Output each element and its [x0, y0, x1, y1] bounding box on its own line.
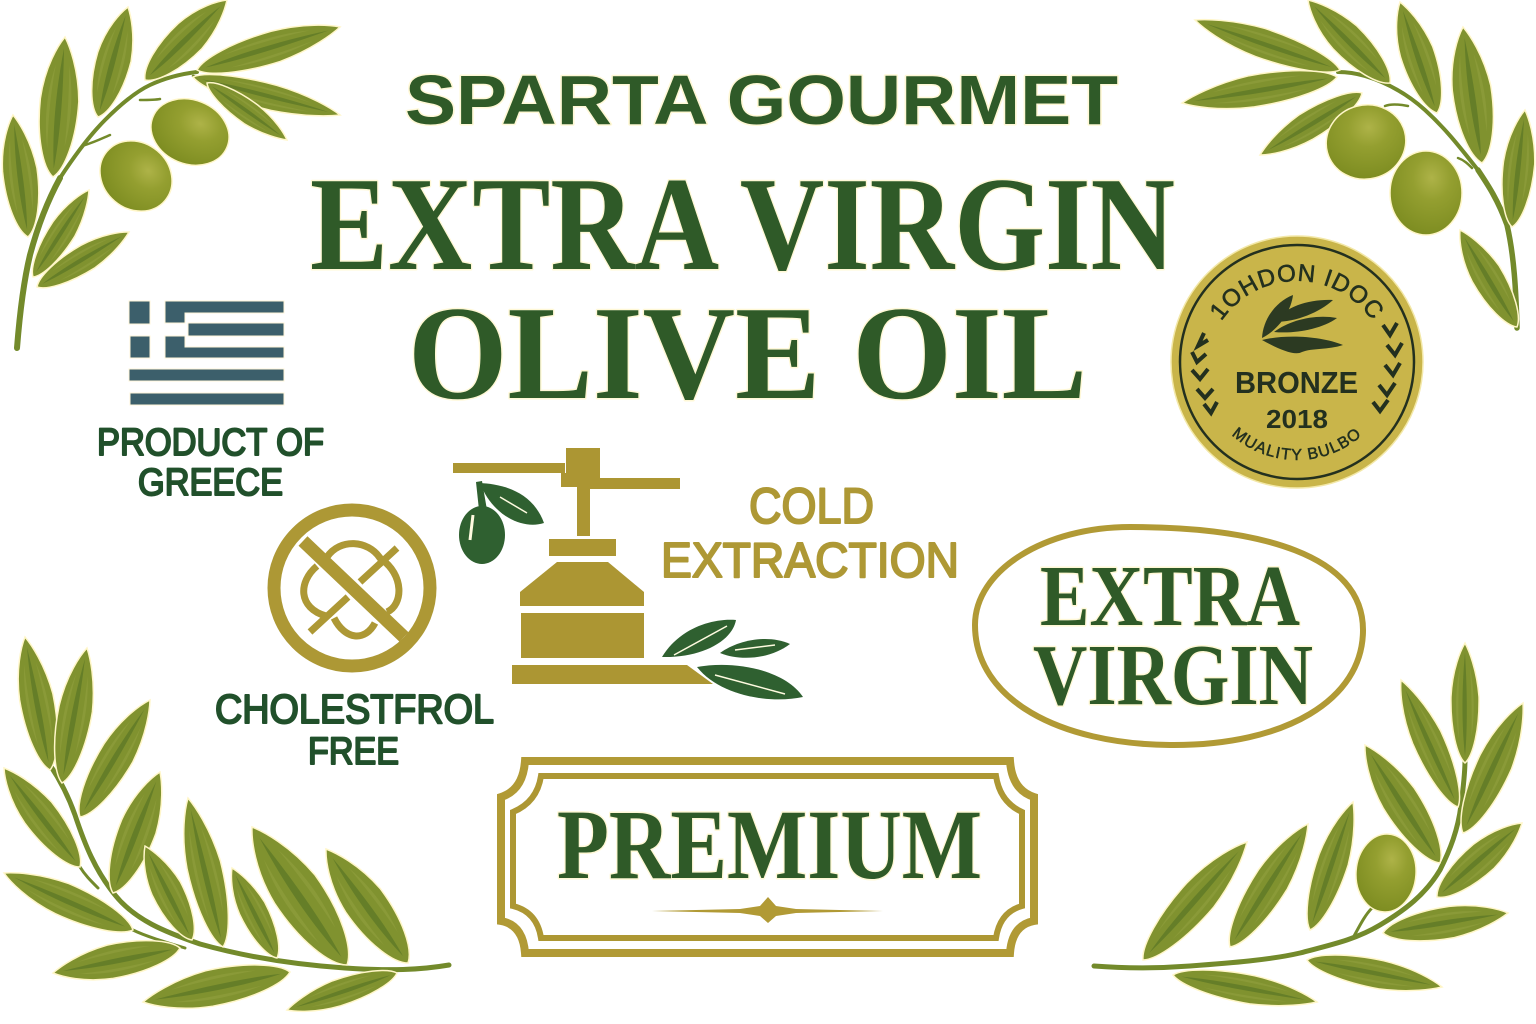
label: cholesterol free: FREE — [308, 731, 399, 773]
icon: olive press — [453, 448, 803, 699]
label: cold extraction — [661, 478, 959, 588]
olive branch: top left — [0, 0, 345, 348]
badge: extra virgin oval: VIRGIN — [1033, 626, 1313, 723]
label: cold extraction: EXTRACTION — [661, 534, 959, 588]
olive branch: bottom right — [1094, 643, 1536, 1016]
medal wreaths — [1192, 323, 1402, 413]
medal bottom text: MUALITY BULBO — [1232, 426, 1360, 460]
medal: bronze award — [1170, 235, 1424, 489]
medal grade: BRONZE — [1235, 365, 1358, 400]
title — [310, 150, 1175, 427]
medal top text: 1OHDON IDOC — [1211, 264, 1383, 320]
brand name: SPARTA GOURMET — [405, 61, 1118, 139]
label: cholesterol free: CHOLESTFROL — [215, 686, 494, 732]
badge: extra virgin oval: EXTRA — [1040, 547, 1300, 644]
badge: premium plaque: PREMIUM — [557, 789, 982, 900]
medal leaf — [1262, 295, 1343, 353]
olive branch: bottom left — [0, 634, 449, 1023]
icon: cholesterol free — [274, 510, 430, 666]
badge: premium plaque — [501, 761, 1034, 953]
label: product of Greece — [97, 422, 324, 504]
badge: extra virgin oval — [975, 527, 1363, 745]
label: product of Greece: GREECE — [138, 462, 283, 504]
olive branch: top right — [1179, 0, 1536, 335]
label: product of Greece: PRODUCT OF — [97, 422, 324, 464]
title: OLIVE OIL — [408, 279, 1087, 427]
label: cold extraction: COLD — [749, 478, 874, 534]
flourish — [652, 897, 883, 923]
title: EXTRA VIRGIN — [310, 150, 1175, 298]
label: cholesterol free — [215, 686, 494, 773]
icon: Greek flag — [129, 301, 284, 405]
medal year: 2018 — [1266, 404, 1328, 434]
